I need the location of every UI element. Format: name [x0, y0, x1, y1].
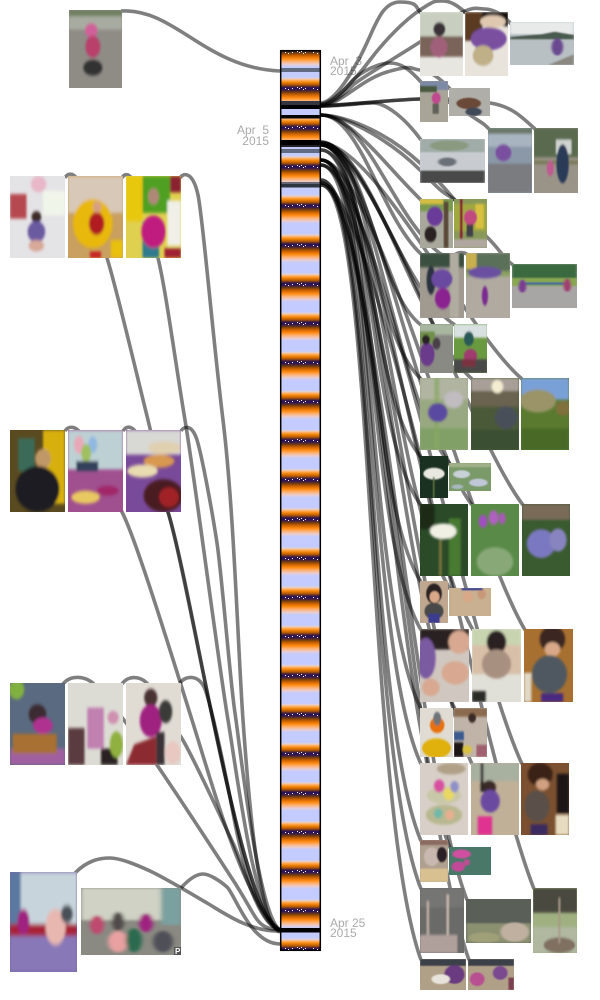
photo: girl painting at table: [420, 12, 463, 76]
photo: party table with balloons: [68, 430, 123, 512]
photo: girl on beach arms raised: [510, 22, 574, 65]
photo: smiling girl portrait: [420, 581, 448, 623]
photo: girl in pink dress in bouncy castle: [126, 176, 181, 258]
photo: boy looking down: [521, 763, 569, 835]
timeline colour strip: [280, 51, 321, 950]
photo: party food on purple table: [126, 430, 181, 512]
photo: white fawn lily on dark: [420, 456, 448, 498]
photo: girl on swing at sandy park: [471, 763, 519, 835]
photo: bluebells by tree trunk: [522, 504, 570, 576]
photo: shooting stars flowers: [471, 504, 519, 576]
photo: girl hanging upside down: [420, 199, 453, 248]
photo: girl on beach in pink: [420, 81, 448, 122]
photo: boy in yellow toy: [68, 176, 123, 258]
photo: crab on sand: [449, 88, 490, 116]
date label: Apr 25 2015: [330, 916, 366, 940]
photo: girls on trampoline: [10, 872, 77, 972]
photo: pink blossoms on green: [449, 847, 491, 875]
date label: Apr 5 2015: [237, 123, 269, 148]
photo: child holding egg close up: [420, 629, 469, 702]
photo: girl on scooter from behind: [420, 324, 453, 373]
photo: orange dye in bowl: [420, 708, 453, 758]
photo: girl on red slide: [126, 683, 181, 765]
photo: bird in bush: [466, 899, 531, 943]
photo: girl climbing on pole: [420, 253, 464, 318]
photo: seagull on beach: [420, 139, 485, 183]
photo: small bird on dry stems: [533, 888, 577, 953]
date label: Apr 3 2015: 2015: [330, 64, 357, 78]
photo: girl in black in tent: [10, 430, 65, 512]
photo: woman and child on beach: [534, 128, 578, 193]
photo: field of white flowers: [449, 463, 491, 491]
photo: dry reeds on grey: [420, 888, 464, 953]
date label: Apr 25 2015: Apr 25: [330, 916, 366, 930]
photo: hands on tile floor: [449, 588, 491, 616]
photo: girl crouching at shore: [488, 128, 532, 193]
photo: girls playing in sand: [420, 959, 466, 990]
photo: girl in party room: [10, 176, 65, 258]
photo: woman dyeing eggs: [472, 629, 521, 702]
photo: children on seesaw: [512, 264, 577, 308]
photo: oak trees on green hill: [521, 378, 569, 450]
photo: man with child in grass: [454, 324, 487, 373]
connector curves: right side: [321, 1, 535, 960]
photo: sunlit meadow with rock: [471, 378, 519, 450]
photo: long party table: [68, 683, 123, 765]
photo: dyed eggs on tiered stand: [420, 763, 468, 835]
date label: Apr 5 2015: 2015: [242, 134, 269, 148]
photo: girl with birthday cake: [10, 683, 65, 765]
photo: table with dye cups: [454, 708, 487, 757]
date label: Apr 5 2015: Apr 5: [237, 123, 269, 137]
photo: purple camas flower: [420, 378, 468, 450]
watermark letter P: P: [175, 947, 181, 956]
date label: Apr 3 2015: [330, 54, 362, 78]
photo: girl on tricycle: [69, 10, 122, 88]
photo: girl with bowl: [465, 12, 508, 76]
photo: boy holding egg: [524, 629, 573, 702]
photo: woman at party table: [420, 840, 448, 882]
photo: girl on play structure: [454, 199, 487, 248]
photo: group of children on stairs: [81, 888, 181, 955]
date label: Apr 25 2015: 2015: [330, 926, 357, 940]
photo: girl balancing arms out: [466, 253, 510, 318]
date label: Apr 3 2015: Apr 3: [330, 54, 362, 68]
connector curves: left side: [63, 11, 280, 944]
photo: girls digging in sand: [468, 959, 514, 990]
photo: white lily close up: [420, 504, 468, 576]
